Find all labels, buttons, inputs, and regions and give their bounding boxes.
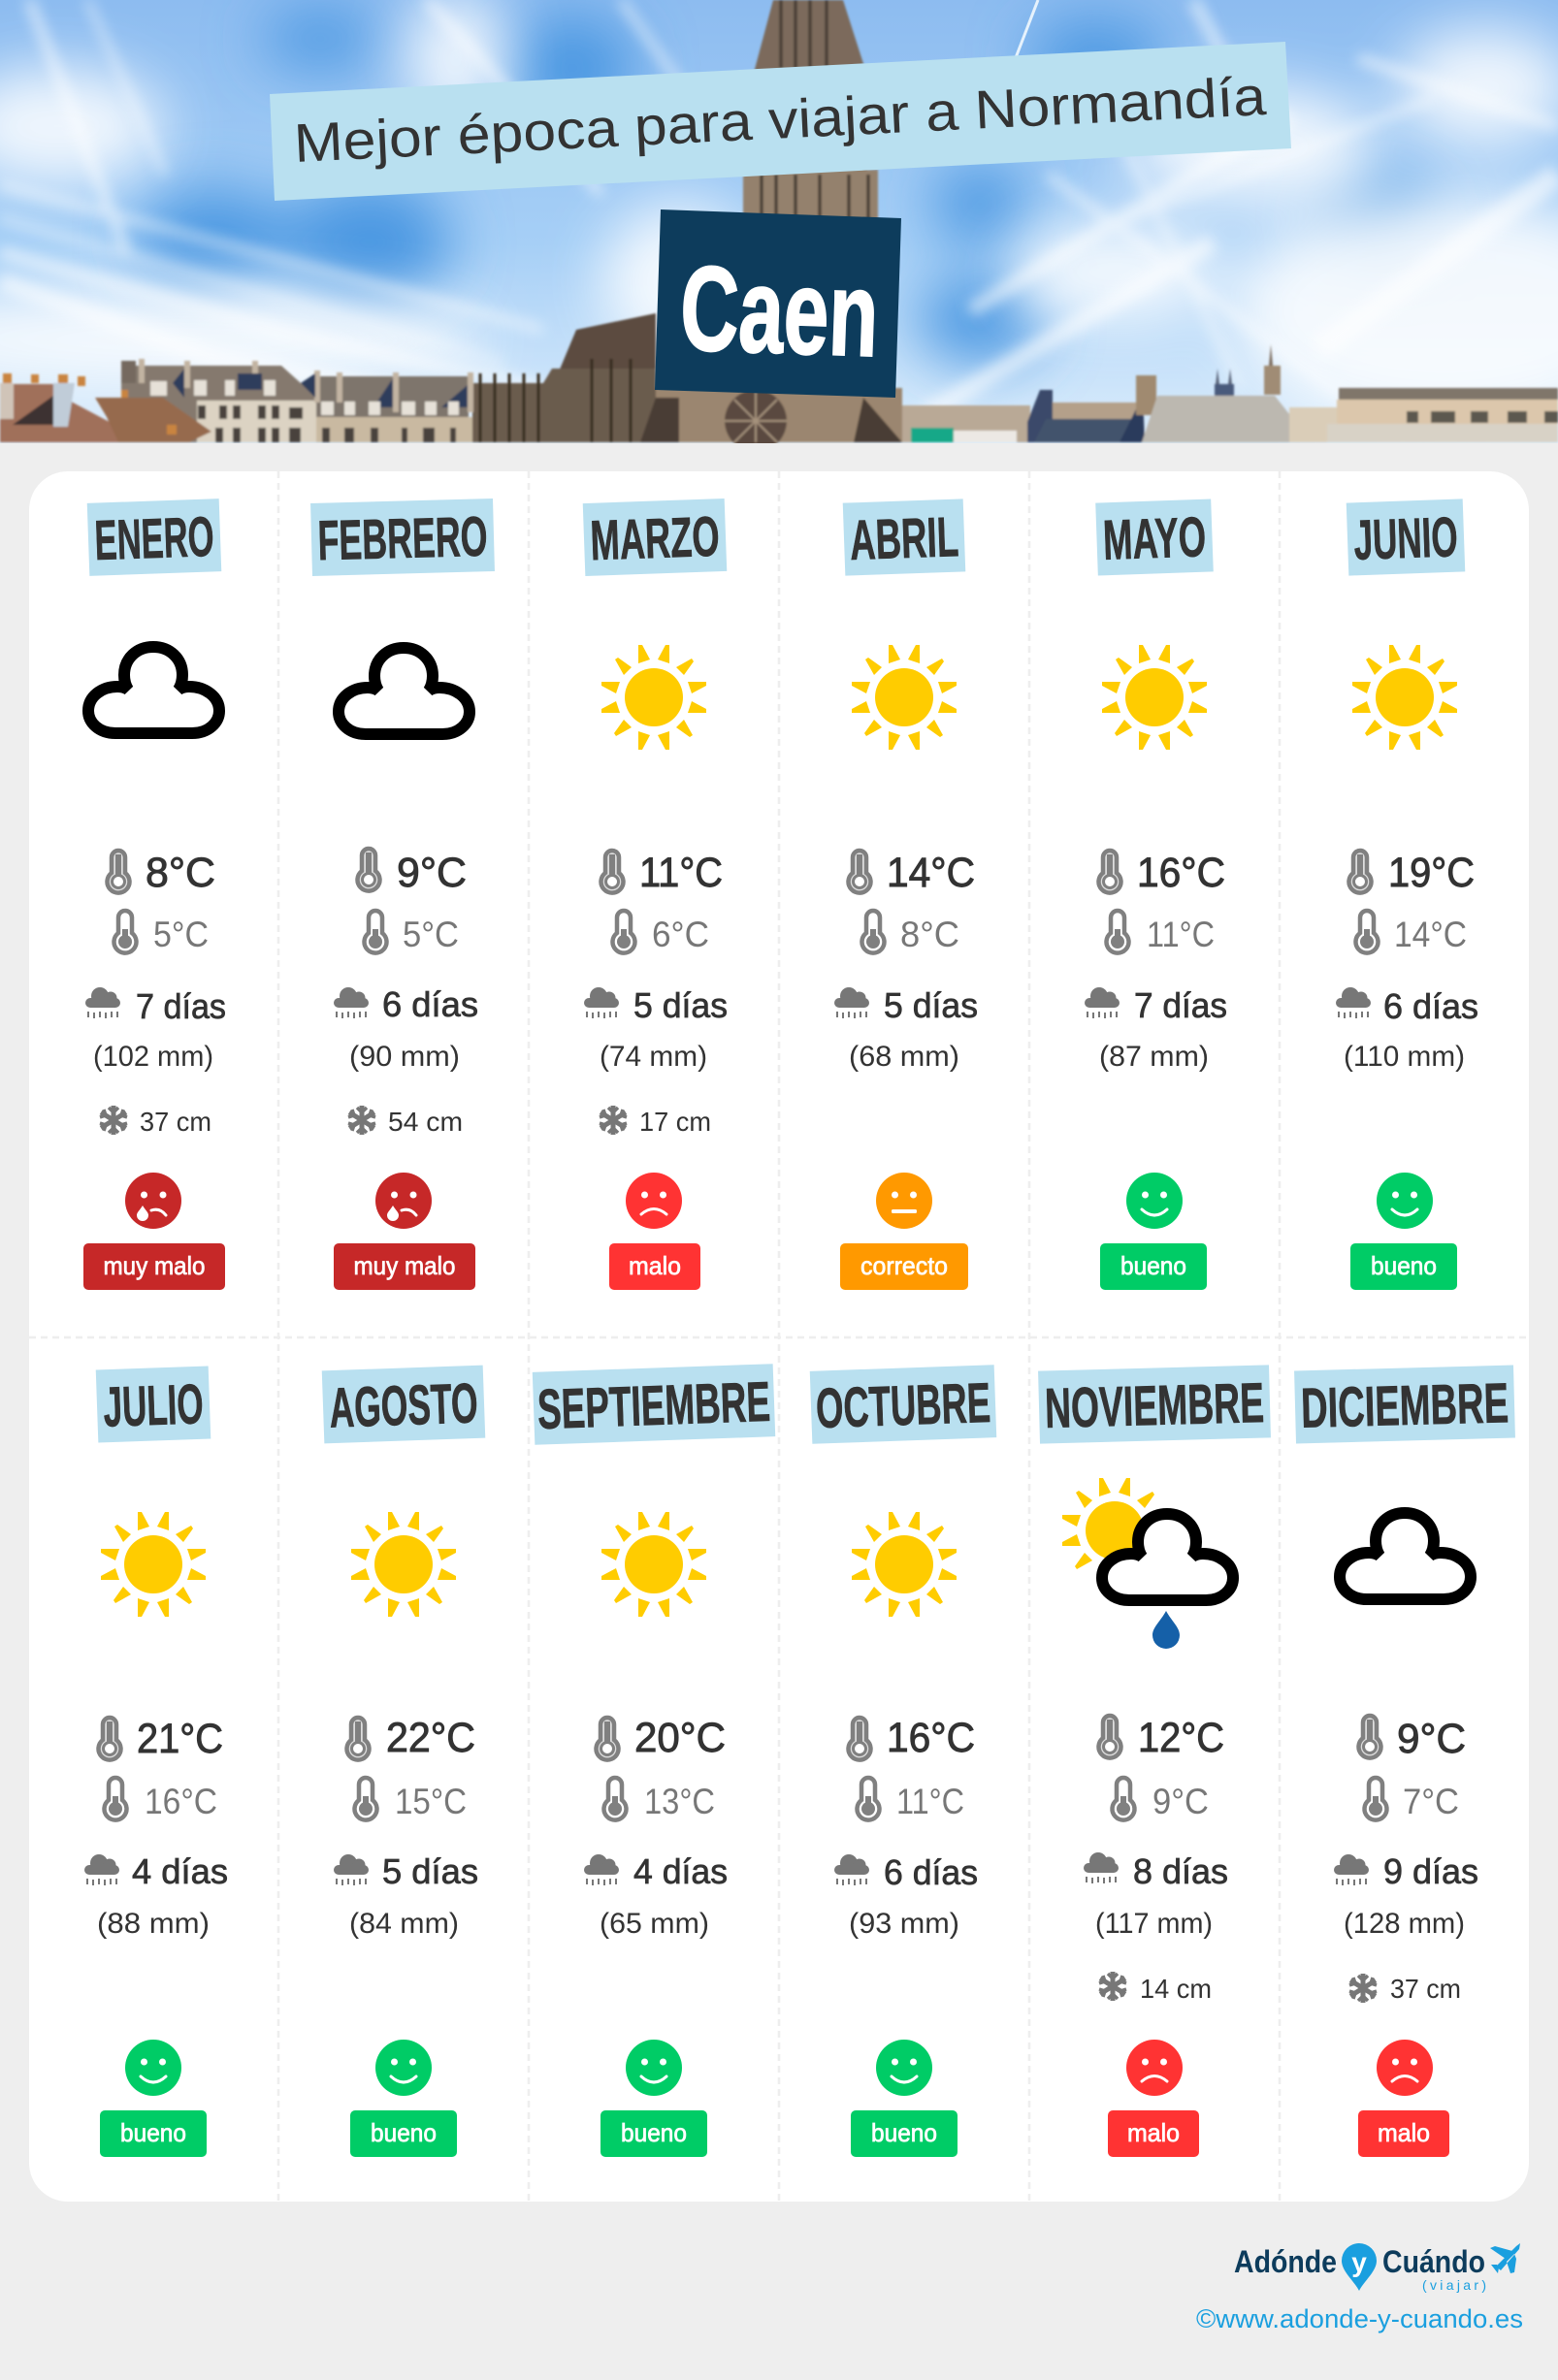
min temperature: 11°C: [896, 1782, 964, 1821]
rating badge: malo: [629, 1251, 681, 1280]
month: febrero: [310, 499, 495, 1290]
rating badge: [1100, 1243, 1207, 1290]
rain days: 5 días: [884, 985, 978, 1025]
min temperature: [603, 1778, 715, 1821]
logo: Adónde y Cuándo: Cuándo: [1382, 2244, 1485, 2279]
max temperature: [99, 1716, 223, 1762]
rating badge: bueno: [1120, 1251, 1186, 1280]
rain days: 6 días: [382, 984, 478, 1024]
max temperature: [1358, 1716, 1466, 1762]
icon: sun: [852, 645, 957, 750]
rainfall: (128 mm): [1344, 1908, 1465, 1940]
icon: happy face: [626, 2040, 682, 2096]
min temperature: 14°C: [1394, 915, 1467, 954]
max temperature: 12°C: [1138, 1715, 1224, 1761]
min temperature: 16°C: [145, 1782, 217, 1821]
max temperature: 20°C: [634, 1715, 726, 1761]
icon: neutral face: [876, 1173, 932, 1229]
header photo: sky and Caen skyline: [0, 0, 1558, 452]
icon: sun: [1352, 645, 1457, 750]
rain days: 4 días: [633, 1851, 728, 1891]
icon: sad face: [1126, 2040, 1183, 2096]
icon: sun: [601, 645, 706, 750]
max temperature: [848, 1715, 975, 1761]
rainfall: (93 mm): [849, 1908, 959, 1940]
month label: JUNIO: [1352, 505, 1459, 572]
max temperature: [1098, 1715, 1224, 1761]
max temperature: [596, 1715, 726, 1761]
month: noviembre: [1038, 1365, 1271, 2157]
min temperature: [1112, 1778, 1209, 1821]
min temperature: 11°C: [1147, 915, 1215, 954]
month label: [1038, 1365, 1271, 1444]
logo: Adónde y Cuándo: [1234, 2243, 1520, 2293]
snowfall: 37 cm: [1390, 1974, 1461, 2004]
rating badge: [350, 2110, 457, 2157]
month: julio: [84, 1366, 228, 2157]
max temperature: 19°C: [1388, 850, 1475, 896]
icon: happy face: [1126, 1173, 1183, 1229]
rating badge: bueno: [621, 2118, 687, 2147]
snowfall: [1349, 1974, 1461, 2004]
rating badge: [1350, 1243, 1457, 1290]
rain days: [84, 1851, 228, 1891]
min temperature: 15°C: [395, 1782, 467, 1821]
month: junio: [1336, 499, 1478, 1290]
month label: [843, 499, 965, 576]
rainfall: (117 mm): [1095, 1908, 1213, 1940]
icon: map pin: [1342, 2243, 1377, 2291]
rating badge: muy malo: [353, 1251, 456, 1280]
icon: happy face: [375, 2040, 432, 2096]
rating badge: [83, 1243, 225, 1290]
icon: happy face: [876, 2040, 932, 2096]
city name box: Caen: [678, 241, 881, 382]
snowfall: 54 cm: [388, 1107, 463, 1137]
icon: sun: [1102, 645, 1207, 750]
max temperature: [347, 1715, 475, 1761]
snowfall: [100, 1106, 211, 1137]
max temperature: [357, 849, 467, 896]
month: abril: [834, 499, 978, 1290]
rain days: 9 días: [1383, 1851, 1478, 1891]
month: septiembre: [533, 1364, 775, 2157]
rain days: [334, 1851, 478, 1891]
rain days: 7 días: [136, 986, 226, 1026]
rain days: [334, 984, 478, 1024]
right rooftops: [902, 405, 1030, 442]
rating badge: [334, 1243, 475, 1290]
month label: [87, 499, 221, 576]
icon: sun: [101, 1512, 206, 1617]
rating badge: [100, 2110, 207, 2157]
rating badge: [840, 1243, 968, 1290]
rating badge: bueno: [871, 2118, 937, 2147]
month: octubre: [810, 1365, 996, 2157]
month: diciembre: [1294, 1366, 1515, 2157]
month label: ABRIL: [849, 505, 959, 572]
icon: cloud: [1340, 1513, 1471, 1599]
min temperature: [1356, 911, 1467, 954]
month label: [583, 499, 727, 576]
rating badge: [600, 2110, 707, 2157]
rainfall: (102 mm): [93, 1041, 213, 1073]
rainfall: (74 mm): [600, 1041, 707, 1073]
rain days: 6 días: [1383, 986, 1478, 1026]
min temperature: 7°C: [1403, 1782, 1459, 1821]
logo: Adónde y Cuándo: Adónde: [1234, 2244, 1337, 2279]
max temperature: 9°C: [397, 850, 467, 896]
max temperature: 16°C: [1137, 850, 1225, 896]
month label: MAYO: [1102, 505, 1207, 572]
rain days: [584, 1851, 728, 1891]
max temperature: [601, 850, 723, 896]
icon: sun: [601, 1512, 706, 1617]
icon: sad face: [1377, 2040, 1433, 2096]
rain days: [1336, 986, 1478, 1026]
rain days: 4 días: [132, 1851, 228, 1891]
min temperature: [1106, 911, 1215, 954]
snowfall: 37 cm: [140, 1107, 211, 1137]
rain days: [834, 985, 978, 1025]
icon: sad face: [626, 1173, 682, 1229]
min temperature: 6°C: [652, 915, 709, 954]
snowfall: 14 cm: [1140, 1974, 1212, 2004]
rain days: 7 días: [1134, 985, 1227, 1025]
rainfall: (68 mm): [849, 1041, 959, 1073]
rating badge: [1358, 2110, 1449, 2157]
rain days: [834, 1852, 978, 1892]
icon: cloud: [88, 647, 219, 733]
max temperature: 22°C: [386, 1715, 475, 1761]
rain days: [1084, 1851, 1228, 1891]
left townhouses: [121, 366, 320, 442]
min temperature: [1364, 1778, 1459, 1821]
min temperature: [861, 911, 959, 954]
snowfall: [600, 1106, 711, 1137]
month label: MARZO: [589, 505, 721, 572]
min temperature: [105, 1778, 217, 1821]
max temperature: 21°C: [137, 1716, 223, 1762]
rating badge: malo: [1127, 2118, 1180, 2147]
month label: [1347, 499, 1465, 576]
month label: FEBRERO: [317, 505, 488, 572]
icon: sun behind cloud with rain drop: [1062, 1478, 1233, 1649]
icon: map pin: y: [1351, 2247, 1367, 2277]
rainfall: (90 mm): [349, 1041, 460, 1073]
snowfall: [1099, 1972, 1212, 2004]
rating badge: bueno: [371, 2118, 437, 2147]
month label: AGOSTO: [328, 1371, 479, 1440]
month label: NOVIEMBRE: [1044, 1371, 1265, 1440]
max temperature: 9°C: [1397, 1716, 1466, 1762]
month: agosto: [322, 1366, 485, 2157]
title banner: Mejor época para viajar a Normandía: [293, 65, 1268, 174]
icon: very sad face: [125, 1173, 181, 1229]
icon: happy face: [1377, 1173, 1433, 1229]
title banner: [270, 42, 1291, 201]
max temperature: [1348, 850, 1475, 896]
rain days: 6 días: [884, 1852, 978, 1892]
rain days: [85, 986, 226, 1026]
icon: sun: [852, 1512, 957, 1617]
month label: [533, 1364, 775, 1445]
min temperature: [114, 911, 209, 954]
rainfall: (87 mm): [1099, 1041, 1209, 1073]
rainfall: (88 mm): [97, 1908, 210, 1940]
snowfall: 17 cm: [639, 1107, 711, 1137]
rating badge: malo: [1378, 2118, 1430, 2147]
rainfall: (84 mm): [349, 1908, 459, 1940]
rain days: [1085, 985, 1227, 1025]
month label: [310, 499, 495, 576]
rating badge: bueno: [120, 2118, 186, 2147]
month label: [322, 1366, 485, 1443]
month: marzo: [583, 499, 728, 1290]
month label: SEPTIEMBRE: [536, 1370, 771, 1441]
min temperature: 9°C: [1152, 1782, 1209, 1821]
max temperature: [107, 850, 215, 896]
rating badge: [609, 1243, 700, 1290]
rating badge: bueno: [1371, 1251, 1437, 1280]
rain days: [584, 985, 728, 1025]
month: mayo: [1085, 499, 1227, 1290]
min temperature: 13°C: [644, 1782, 715, 1821]
min temperature: [355, 1778, 467, 1821]
month label: ENERO: [93, 505, 215, 572]
max temperature: 8°C: [146, 850, 215, 896]
max temperature: [1098, 850, 1225, 896]
month label: [810, 1365, 996, 1444]
icon: cloud: [339, 648, 470, 734]
rain days: 5 días: [633, 985, 728, 1025]
rating badge: muy malo: [103, 1251, 206, 1280]
website credit: ©www.adonde-y-cuando.es: [1196, 2304, 1523, 2333]
icon: very sad face: [375, 1173, 432, 1229]
month label: JULIO: [102, 1372, 205, 1439]
rain days: [1334, 1851, 1478, 1891]
icon: happy face: [125, 2040, 181, 2096]
max temperature: 14°C: [887, 850, 975, 896]
rating badge: correcto: [860, 1251, 948, 1280]
cathedral tower: [0, 0, 1558, 452]
contrail: [1015, 0, 1040, 56]
min temperature: 8°C: [900, 915, 959, 954]
rainfall: (65 mm): [600, 1908, 709, 1940]
min temperature: 5°C: [403, 915, 459, 954]
snowfall: [348, 1106, 463, 1137]
max temperature: [848, 850, 975, 896]
icon: airplane: [1490, 2243, 1520, 2273]
month label: [96, 1366, 211, 1443]
max temperature: 16°C: [887, 1715, 975, 1761]
icon: sun: [351, 1512, 456, 1617]
rating badge: [1108, 2110, 1199, 2157]
rating badge: [851, 2110, 958, 2157]
month: enero: [83, 499, 226, 1290]
min temperature: [365, 911, 459, 954]
rain days: 5 días: [382, 1851, 478, 1891]
min temperature: [858, 1778, 964, 1821]
month label: [1095, 499, 1214, 576]
month label: OCTUBRE: [815, 1371, 991, 1440]
min temperature: [613, 911, 709, 954]
city name box: [655, 209, 901, 398]
max temperature: 11°C: [639, 850, 723, 896]
nave and facade: [552, 313, 656, 442]
min temperature: 5°C: [153, 915, 209, 954]
rainfall: (110 mm): [1344, 1041, 1465, 1073]
calendar card: [29, 471, 1529, 2202]
rain days: 8 días: [1133, 1851, 1228, 1891]
logo: Adónde y Cuándo: (viajar): [1422, 2277, 1486, 2293]
